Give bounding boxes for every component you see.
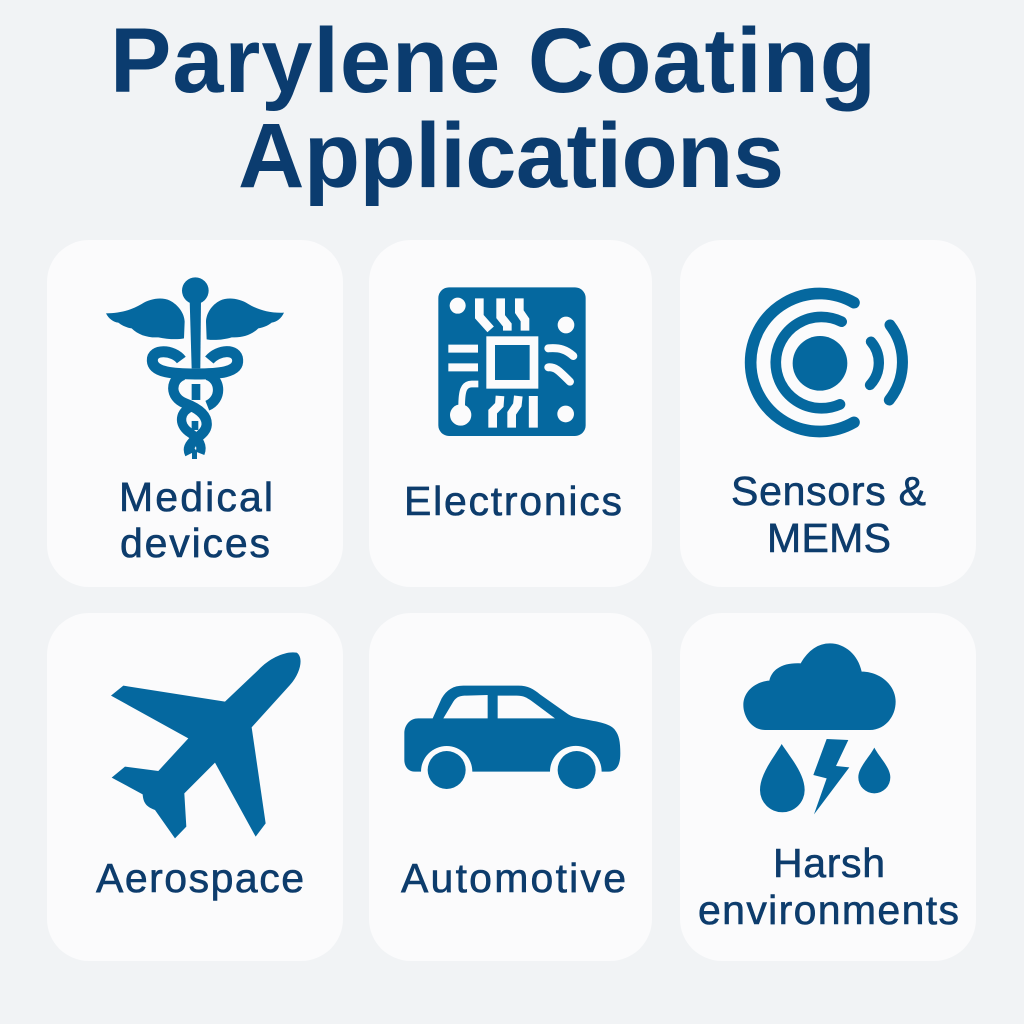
panel: automotive bbox=[369, 613, 652, 961]
panel: medical devices bbox=[47, 240, 343, 587]
label: harsh environments bbox=[698, 840, 959, 933]
label: automotive: Automotive bbox=[401, 855, 626, 901]
icon: sensor waves bbox=[751, 293, 902, 431]
label: electronics: Electronics bbox=[404, 478, 622, 524]
title: Applications bbox=[238, 105, 784, 207]
label: sensors and MEMS: Sensors & bbox=[731, 468, 926, 514]
title: Parylene Coating bbox=[110, 10, 876, 112]
icon: circuit board bbox=[438, 287, 586, 436]
label: medical devices bbox=[119, 474, 273, 566]
label: aerospace: Aerospace bbox=[96, 855, 304, 901]
panel: electronics bbox=[369, 240, 652, 587]
label: medical devices: Medical bbox=[119, 474, 273, 520]
label: sensors and MEMS bbox=[731, 468, 926, 561]
panel: aerospace bbox=[47, 613, 343, 961]
label: sensors and MEMS: MEMS bbox=[767, 515, 891, 561]
title bbox=[110, 10, 876, 207]
label: harsh environments: Harsh bbox=[773, 840, 885, 886]
icon: car bbox=[404, 686, 620, 789]
icon: storm cloud bbox=[743, 643, 896, 814]
panel: sensors and MEMS bbox=[680, 240, 976, 587]
icon: caduceus bbox=[106, 277, 284, 459]
label: medical devices: devices bbox=[120, 520, 270, 566]
icon: airplane bbox=[111, 652, 301, 838]
panel: harsh environments bbox=[680, 613, 976, 961]
label: harsh environments: environments bbox=[698, 887, 959, 933]
